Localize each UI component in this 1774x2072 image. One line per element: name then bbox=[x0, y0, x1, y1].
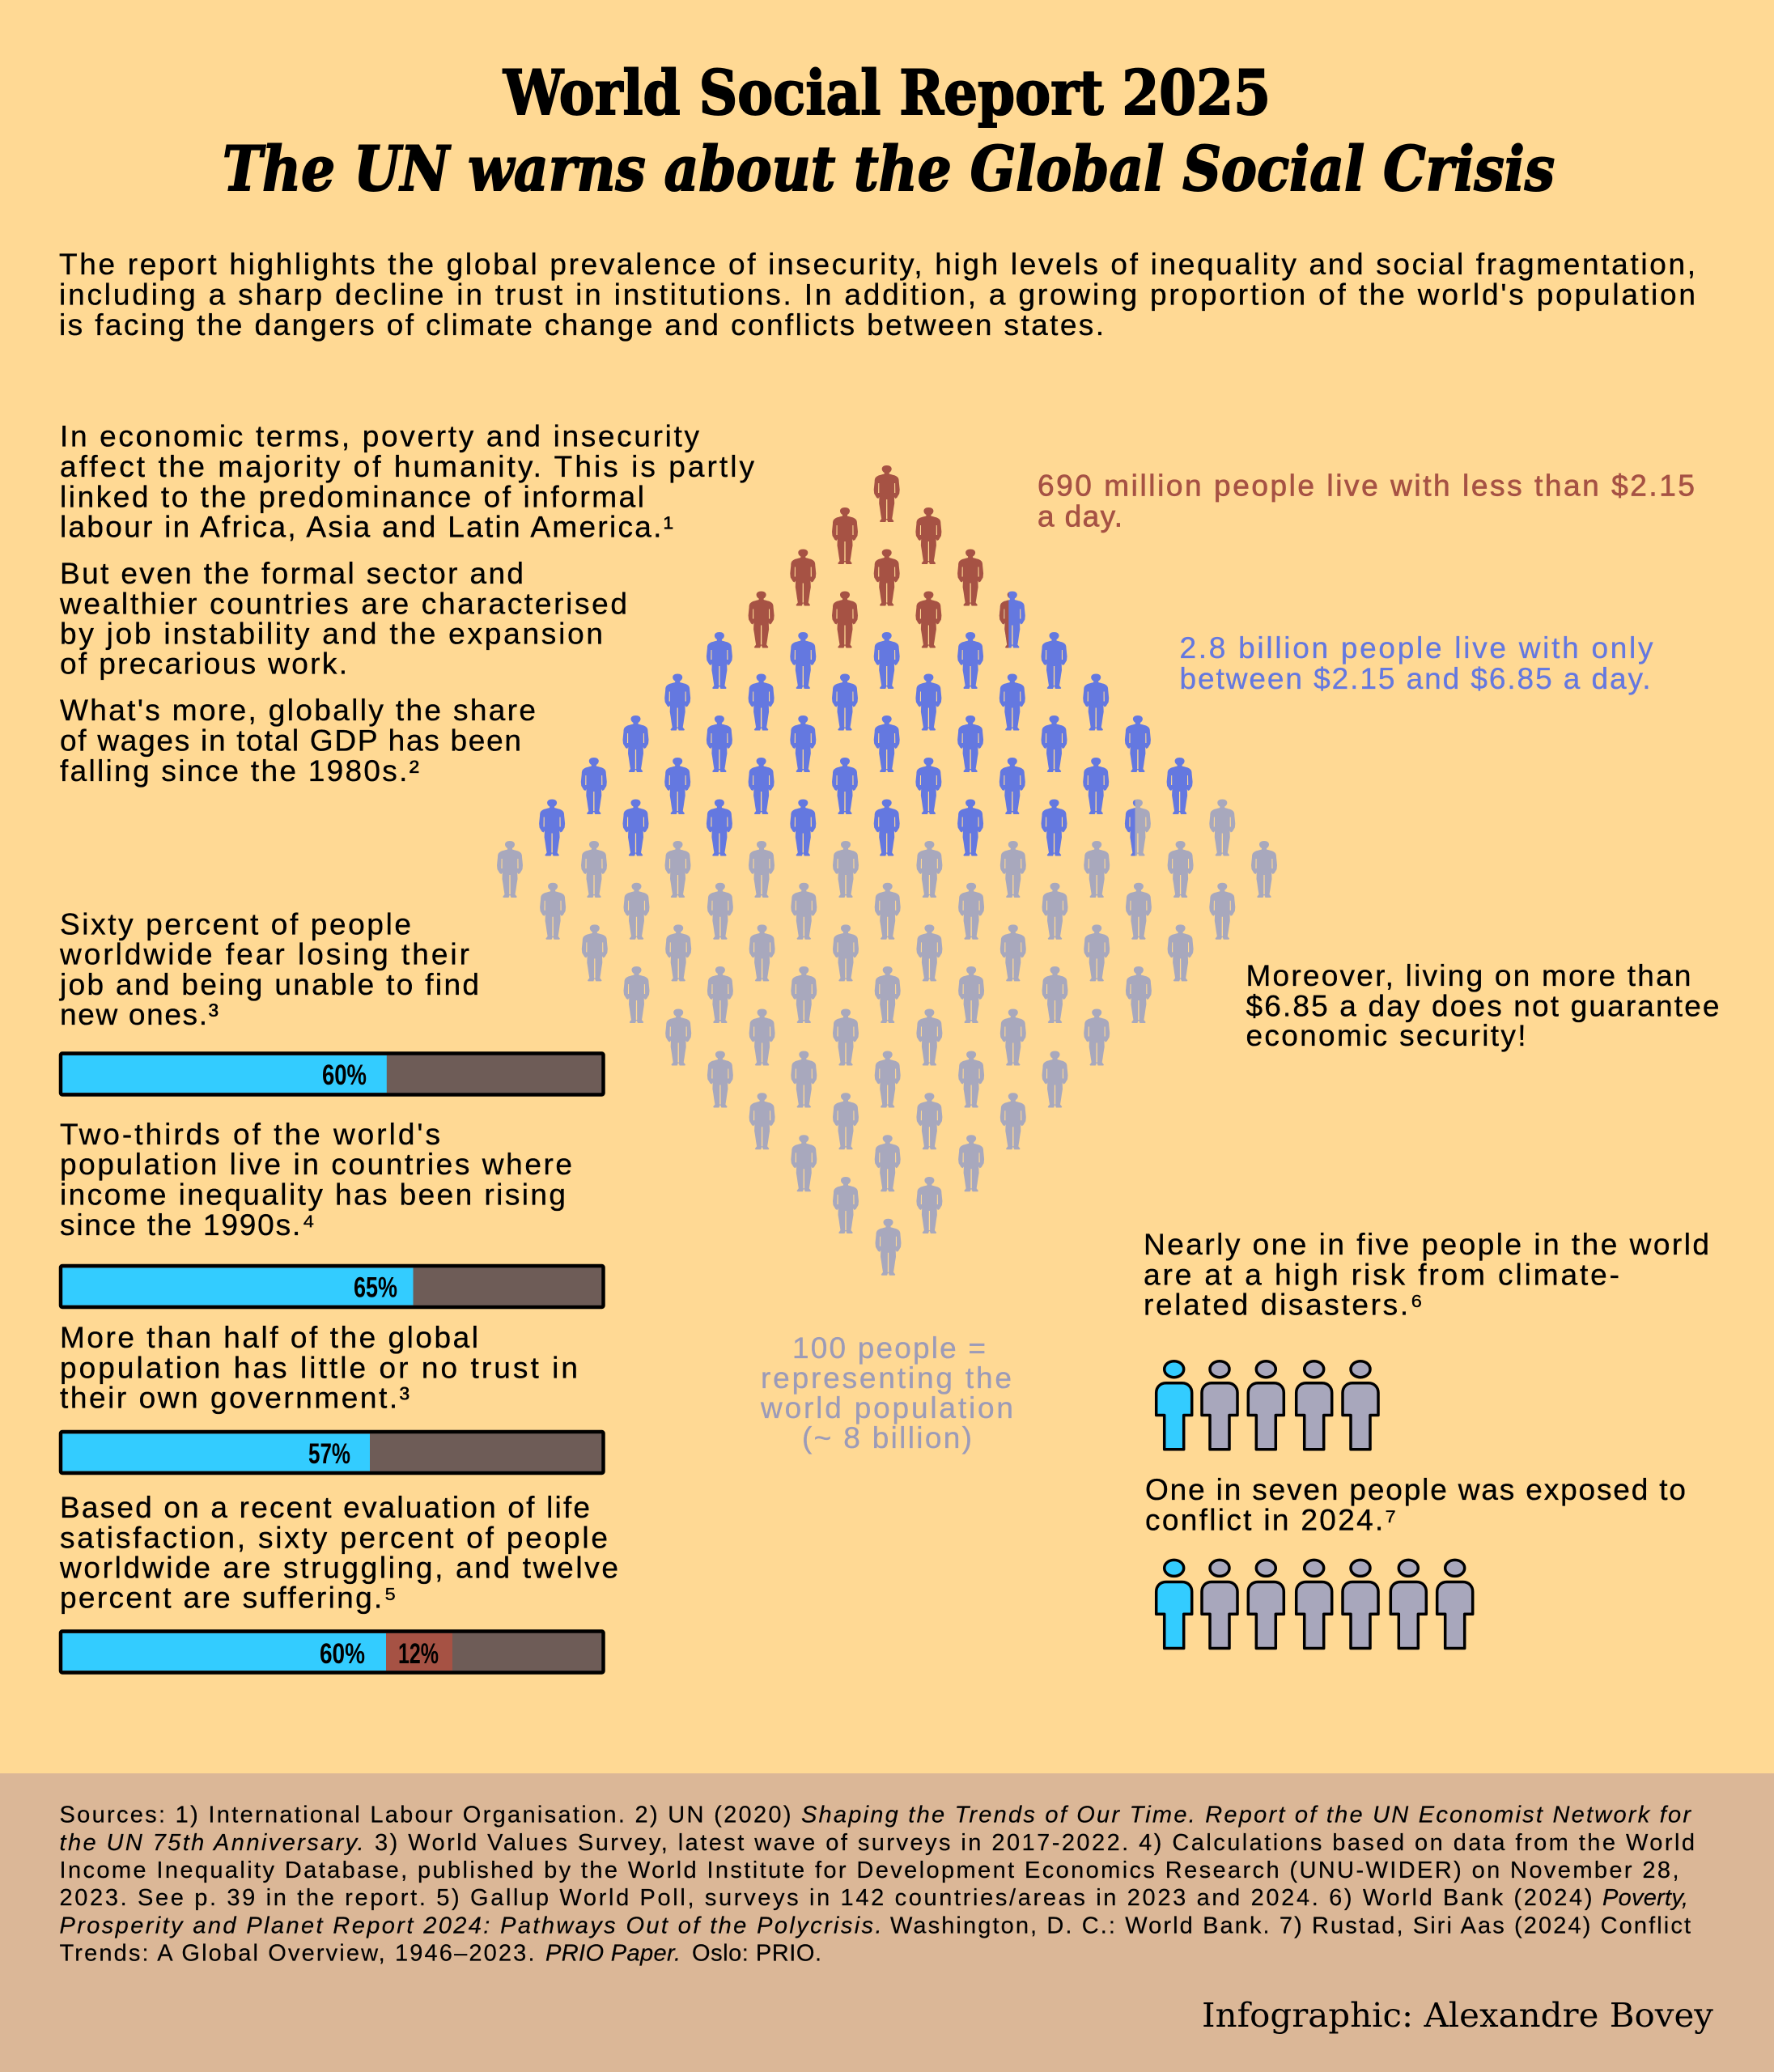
text: wages paragraph bbox=[60, 694, 536, 788]
bar chart: 57 percent: 57% bbox=[308, 1438, 350, 1470]
bar chart: 65 percent: 65% bbox=[354, 1272, 397, 1304]
text: climate risk: Nearly one in five people in the world bbox=[1144, 1228, 1709, 1261]
label: moreover: $6.85 a day does not guarantee bbox=[1246, 990, 1719, 1023]
label: 2.8 billion: 2.8 billion people live with only bbox=[1180, 631, 1653, 664]
text: income inequality: Two-thirds of the world's bbox=[60, 1118, 440, 1151]
title bbox=[223, 57, 1555, 205]
red people: below $2.15 bbox=[749, 465, 983, 648]
split person: blue and grey bbox=[1125, 800, 1151, 856]
sources text: 3) World Values Survey, latest wave of surveys in 2017-2022. 4) Calculations based on data from the World bbox=[375, 1830, 1695, 1856]
label: moreover: Moreover, living on more than bbox=[1246, 959, 1691, 992]
icon: highlighted person bbox=[1156, 1560, 1192, 1648]
label: 2.8 billion bbox=[1180, 631, 1653, 695]
text: fear losing job: new ones.³ bbox=[60, 998, 219, 1031]
legend: 100 people: world population bbox=[760, 1391, 1013, 1424]
label: 690 million: 690 million people live with less than $2.15 bbox=[1038, 469, 1695, 502]
label: 690 million: a day. bbox=[1038, 500, 1123, 533]
text: life satisfaction: percent are suffering.⁵ bbox=[60, 1582, 397, 1615]
legend: 100 people bbox=[760, 1331, 1013, 1454]
icon: highlighted person bbox=[1156, 1361, 1192, 1450]
label: 690 million bbox=[1038, 469, 1695, 533]
icons: one in five people bbox=[1156, 1361, 1378, 1450]
text: climate risk: related disasters.⁶ bbox=[1144, 1289, 1423, 1321]
text: formal sector paragraph: by job instability and the expansion bbox=[60, 618, 603, 651]
text: trust in government: More than half of the global bbox=[60, 1321, 478, 1354]
text: life satisfaction: satisfaction, sixty percent of people bbox=[60, 1521, 608, 1554]
bar chart: 60 and 12 percent: 60% bbox=[320, 1638, 365, 1670]
credit: Infographic: Alexandre Bovey bbox=[1202, 1996, 1714, 2035]
text: climate risk bbox=[1144, 1228, 1709, 1321]
sources text bbox=[60, 1802, 1695, 1967]
text: conflict exposure: conflict in 2024.⁷ bbox=[1145, 1504, 1396, 1537]
label: moreover bbox=[1246, 959, 1719, 1052]
text: fear losing job: worldwide fear losing their bbox=[59, 938, 469, 971]
sources text: Prosperity and Planet Report 2024: Pathways Out of the Polycrisis. bbox=[60, 1913, 882, 1938]
sources text: Sources: 1) International Labour Organisation. 2) UN (2020) bbox=[60, 1802, 791, 1828]
text: conflict exposure: One in seven people was exposed to bbox=[1145, 1473, 1686, 1506]
text: income inequality bbox=[60, 1118, 572, 1242]
text: economic terms paragraph: In economic terms, poverty and insecurity bbox=[60, 420, 700, 453]
text: trust in government: population has little or no trust in bbox=[60, 1351, 578, 1384]
bar chart: 60 and 12 percent bbox=[61, 1632, 604, 1672]
text: wages paragraph: What's more, globally the share bbox=[60, 694, 536, 727]
sources text: PRIO Paper. bbox=[545, 1941, 681, 1967]
people diamond: 100 people bbox=[497, 465, 1277, 1276]
text: life satisfaction: Based on a recent evaluation of life bbox=[60, 1491, 590, 1524]
sources text: Poverty, bbox=[1602, 1885, 1688, 1911]
intro text: is facing the dangers of climate change and conflicts between states. bbox=[59, 308, 1104, 342]
text: formal sector paragraph: But even the formal sector and bbox=[60, 557, 524, 590]
text: trust in government: their own government.³ bbox=[60, 1381, 410, 1414]
sources text: 2023. See p. 39 in the report. 5) Gallup World Poll, surveys in 142 countries/areas in 2023 and 2024. 6) World Bank (2024) bbox=[60, 1885, 1593, 1911]
legend: 100 people: (~ 8 billion) bbox=[802, 1421, 972, 1454]
intro text: The report highlights the global prevalence of insecurity, high levels of inequality and social fragmentation, bbox=[59, 248, 1695, 281]
text: economic terms paragraph bbox=[60, 420, 754, 544]
text: fear losing job: job and being unable to find bbox=[59, 968, 479, 1001]
title: The UN warns about the Global Social Crisis bbox=[223, 133, 1555, 205]
text: income inequality: since the 1990s.⁴ bbox=[60, 1208, 315, 1242]
text: formal sector paragraph: wealthier countries are characterised bbox=[59, 587, 627, 620]
text: conflict exposure bbox=[1145, 1473, 1686, 1537]
intro text: including a sharp decline in trust in institutions. In addition, a growing proportion of the world's population bbox=[59, 278, 1695, 311]
text: fear losing job bbox=[59, 907, 479, 1031]
bar chart: 60 percent bbox=[61, 1054, 604, 1094]
legend: 100 people: 100 people = bbox=[792, 1331, 986, 1365]
label: 2.8 billion: between $2.15 and $6.85 a day. bbox=[1180, 662, 1651, 695]
sources text: Trends: A Global Overview, 1946–2023. bbox=[60, 1941, 534, 1967]
label: moreover: economic security! bbox=[1246, 1019, 1526, 1052]
sources text: Shaping the Trends of Our Time. Report of the UN Economist Network for bbox=[801, 1802, 1691, 1828]
sources text: Oslo: PRIO. bbox=[692, 1941, 821, 1967]
footer panel bbox=[0, 1773, 1774, 2072]
bar chart: 65 percent bbox=[61, 1266, 604, 1307]
text: economic terms paragraph: labour in Africa, Asia and Latin America.¹ bbox=[60, 510, 673, 544]
text: life satisfaction bbox=[59, 1491, 618, 1615]
blue people: $2.15 to $6.85 bbox=[539, 632, 1193, 856]
sources text: the UN 75th Anniversary. bbox=[60, 1830, 364, 1856]
grey people: above $6.85 bbox=[497, 800, 1277, 1276]
text: economic terms paragraph: affect the majority of humanity. This is partly bbox=[60, 450, 754, 483]
sources text: Washington, D. C.: World Bank. 7) Rustad, Siri Aas (2024) Conflict bbox=[890, 1913, 1691, 1938]
intro text bbox=[59, 248, 1695, 342]
legend: 100 people: representing the bbox=[761, 1361, 1012, 1395]
icons: one in seven people bbox=[1156, 1560, 1473, 1648]
text: wages paragraph: of wages in total GDP has been bbox=[60, 724, 521, 758]
text: economic terms paragraph: linked to the predominance of informal bbox=[60, 481, 644, 513]
text: fear losing job: Sixty percent of people bbox=[60, 907, 411, 940]
text: income inequality: income inequality has been rising bbox=[60, 1178, 566, 1211]
text: income inequality: population live in countries where bbox=[60, 1148, 572, 1181]
bar chart: 60 percent: 60% bbox=[322, 1059, 367, 1091]
bar chart: 60 and 12 percent: 12% bbox=[398, 1638, 439, 1670]
sources text: Income Inequality Database, published by the World Institute for Development Economics Research (UNU-WIDER) on November 28, bbox=[60, 1858, 1679, 1883]
text: trust in government bbox=[60, 1321, 578, 1414]
title: World Social Report 2025 bbox=[503, 57, 1271, 129]
text: climate risk: are at a high risk from climate- bbox=[1144, 1258, 1619, 1291]
text: wages paragraph: falling since the 1980s.² bbox=[60, 754, 419, 788]
text: formal sector paragraph bbox=[59, 557, 627, 681]
bar chart: 57 percent bbox=[61, 1432, 604, 1473]
split person: red and blue bbox=[999, 591, 1025, 648]
text: formal sector paragraph: of precarious work. bbox=[60, 648, 347, 681]
text: life satisfaction: worldwide are struggling, and twelve bbox=[59, 1551, 618, 1584]
